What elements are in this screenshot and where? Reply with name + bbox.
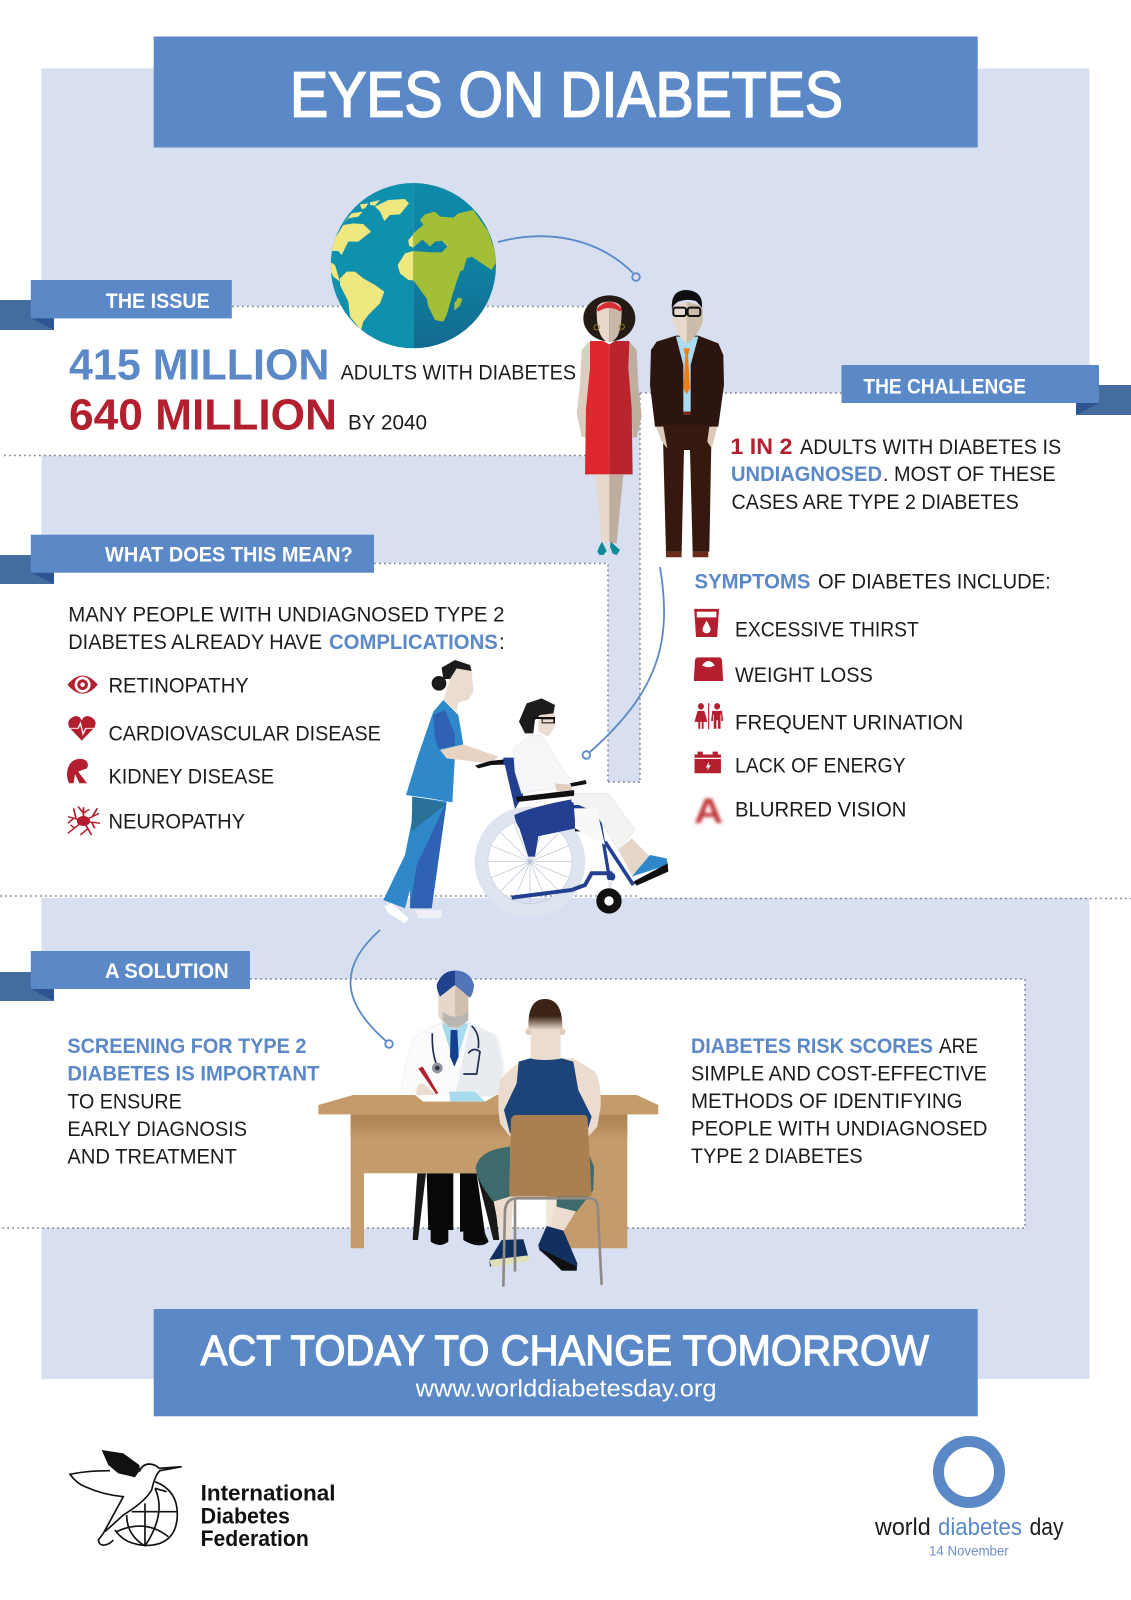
call to action: ACT TODAY TO CHANGE TOMORROW (201, 1327, 929, 1375)
logo wordmark: day (1030, 1514, 1064, 1541)
connector: people to wheelchair (583, 567, 664, 759)
icon: blue circle (938, 1442, 1000, 1502)
panel: the issue background (0, 306, 612, 456)
doctor (401, 971, 503, 1245)
heading: symptoms: OF DIABETES INCLUDE: (818, 571, 1051, 594)
panel: a solution background (0, 979, 1025, 1228)
light blue background panel (42, 68, 1090, 1379)
organisation name: Diabetes (201, 1503, 290, 1528)
text block: the challenge: 1 IN 2 (730, 434, 792, 459)
illustration: woman (577, 295, 642, 555)
heading: what does this mean: WHAT DOES THIS MEAN? (105, 544, 353, 567)
icon: toilet people (695, 703, 723, 729)
icon: weighing scale (694, 657, 723, 681)
text block: screening: AND TREATMENT (67, 1146, 237, 1168)
item: retinopathy: RETINOPATHY (108, 675, 249, 698)
illustration: doctor and patient at desk (318, 971, 658, 1287)
wheelchair (475, 758, 633, 914)
seated patient (476, 999, 602, 1287)
connector: wheelchair to doctor (350, 930, 393, 1048)
icon: battery (695, 752, 721, 773)
panel: the challenge background (640, 393, 1131, 898)
text block: global numbers: 415 MILLION (69, 341, 330, 390)
icon: eye (67, 676, 98, 694)
text block: risk scores: DIABETES RISK SCORES (691, 1035, 933, 1058)
item: kidney disease: KIDNEY DISEASE (108, 765, 274, 788)
connector: globe to people (498, 236, 640, 281)
organisation name: International (201, 1481, 336, 1506)
footer banner (154, 1309, 978, 1416)
text block: the challenge (730, 434, 1061, 514)
text block: the challenge: ADULTS WITH DIABETES IS (800, 436, 1061, 459)
logo wordmark (874, 1514, 1064, 1541)
panel: what does this mean background (0, 563, 640, 898)
ribbon: a solution (0, 951, 250, 1001)
text block: screening: TO ENSURE (67, 1090, 182, 1114)
list: complications (67, 675, 381, 835)
text block: risk scores: TYPE 2 DIABETES (691, 1145, 863, 1168)
organisation name (201, 1481, 336, 1551)
text block: the challenge: . MOST OF THESE (883, 463, 1056, 486)
desk (318, 1095, 658, 1248)
text block: risk scores: SIMPLE AND COST-EFFECTIVE (691, 1063, 987, 1086)
logo wordmark: world (874, 1514, 931, 1541)
text block: complications intro: : (499, 631, 505, 654)
text block: risk scores (691, 1035, 988, 1168)
date: 14 November (929, 1543, 1009, 1559)
title: EYES ON DIABETES (290, 59, 843, 131)
text block: screening: EARLY DIAGNOSIS (67, 1118, 247, 1141)
website: www.worlddiabetesday.org (415, 1376, 716, 1403)
heading: symptoms (694, 571, 1051, 594)
text block: screening (67, 1035, 320, 1168)
text block: complications intro: MANY PEOPLE WITH UNDIAGNOSED TYPE 2 (68, 604, 505, 627)
text block: risk scores: PEOPLE WITH UNDIAGNOSED (691, 1118, 988, 1141)
item: lack of energy: LACK OF ENERGY (735, 755, 906, 778)
ribbon: what does this mean (0, 535, 374, 584)
item: cardiovascular disease: CARDIOVASCULAR DISEASE (108, 722, 381, 745)
item: weight loss: WEIGHT LOSS (735, 664, 873, 687)
logo: International Diabetes Federation (70, 1450, 336, 1551)
item: frequent urination: FREQUENT URINATION (735, 711, 963, 734)
ribbon: the challenge (842, 365, 1131, 415)
text block: the challenge: CASES ARE TYPE 2 DIABETES (732, 491, 1019, 514)
ribbon: the issue (0, 280, 232, 330)
icon: globe (330, 183, 497, 348)
text block: risk scores: METHODS OF IDENTIFYING (691, 1090, 963, 1113)
icon: neuron (68, 807, 100, 835)
icon: heart with pulse (67, 716, 96, 741)
logo: World Diabetes Day (874, 1442, 1064, 1559)
item: neuropathy: NEUROPATHY (108, 810, 245, 833)
item: excessive thirst: EXCESSIVE THIRST (735, 618, 919, 641)
text block: global numbers: 640 MILLION (69, 390, 337, 439)
illustration: nurse and patient in wheelchair (383, 660, 668, 923)
text block: global numbers (69, 341, 576, 439)
nurse (383, 660, 498, 923)
icon: glass of water (694, 609, 719, 637)
item: blurred vision: BLURRED VISION (735, 798, 906, 821)
text block: screening: DIABETES IS IMPORTANT (67, 1063, 320, 1086)
text block: complications intro (68, 604, 505, 654)
heading: the challenge: THE CHALLENGE (863, 376, 1026, 398)
text block: complications intro: COMPLICATIONS (329, 631, 498, 654)
list: symptoms (694, 609, 963, 831)
logo wordmark: diabetes (938, 1514, 1022, 1541)
icon: hummingbird over globe (70, 1450, 182, 1546)
text block: screening: SCREENING FOR TYPE 2 (67, 1035, 306, 1058)
heading: symptoms: SYMPTOMS (694, 571, 810, 594)
organisation name: Federation (201, 1526, 309, 1551)
text block: global numbers: ADULTS WITH DIABETES (341, 362, 576, 385)
text block: the challenge: UNDIAGNOSED (731, 463, 882, 486)
patient (513, 698, 668, 886)
text block: risk scores: ARE (939, 1035, 978, 1058)
heading: the issue: THE ISSUE (106, 290, 210, 313)
title banner (154, 36, 978, 148)
heading: a solution: A SOLUTION (105, 960, 229, 983)
illustration: man (650, 290, 724, 557)
text block: global numbers: BY 2040 (348, 411, 427, 434)
icon: blurred letter A: A (694, 792, 723, 831)
text block: complications intro: DIABETES ALREADY HAVE (68, 631, 322, 654)
icon: kidney (67, 759, 88, 783)
